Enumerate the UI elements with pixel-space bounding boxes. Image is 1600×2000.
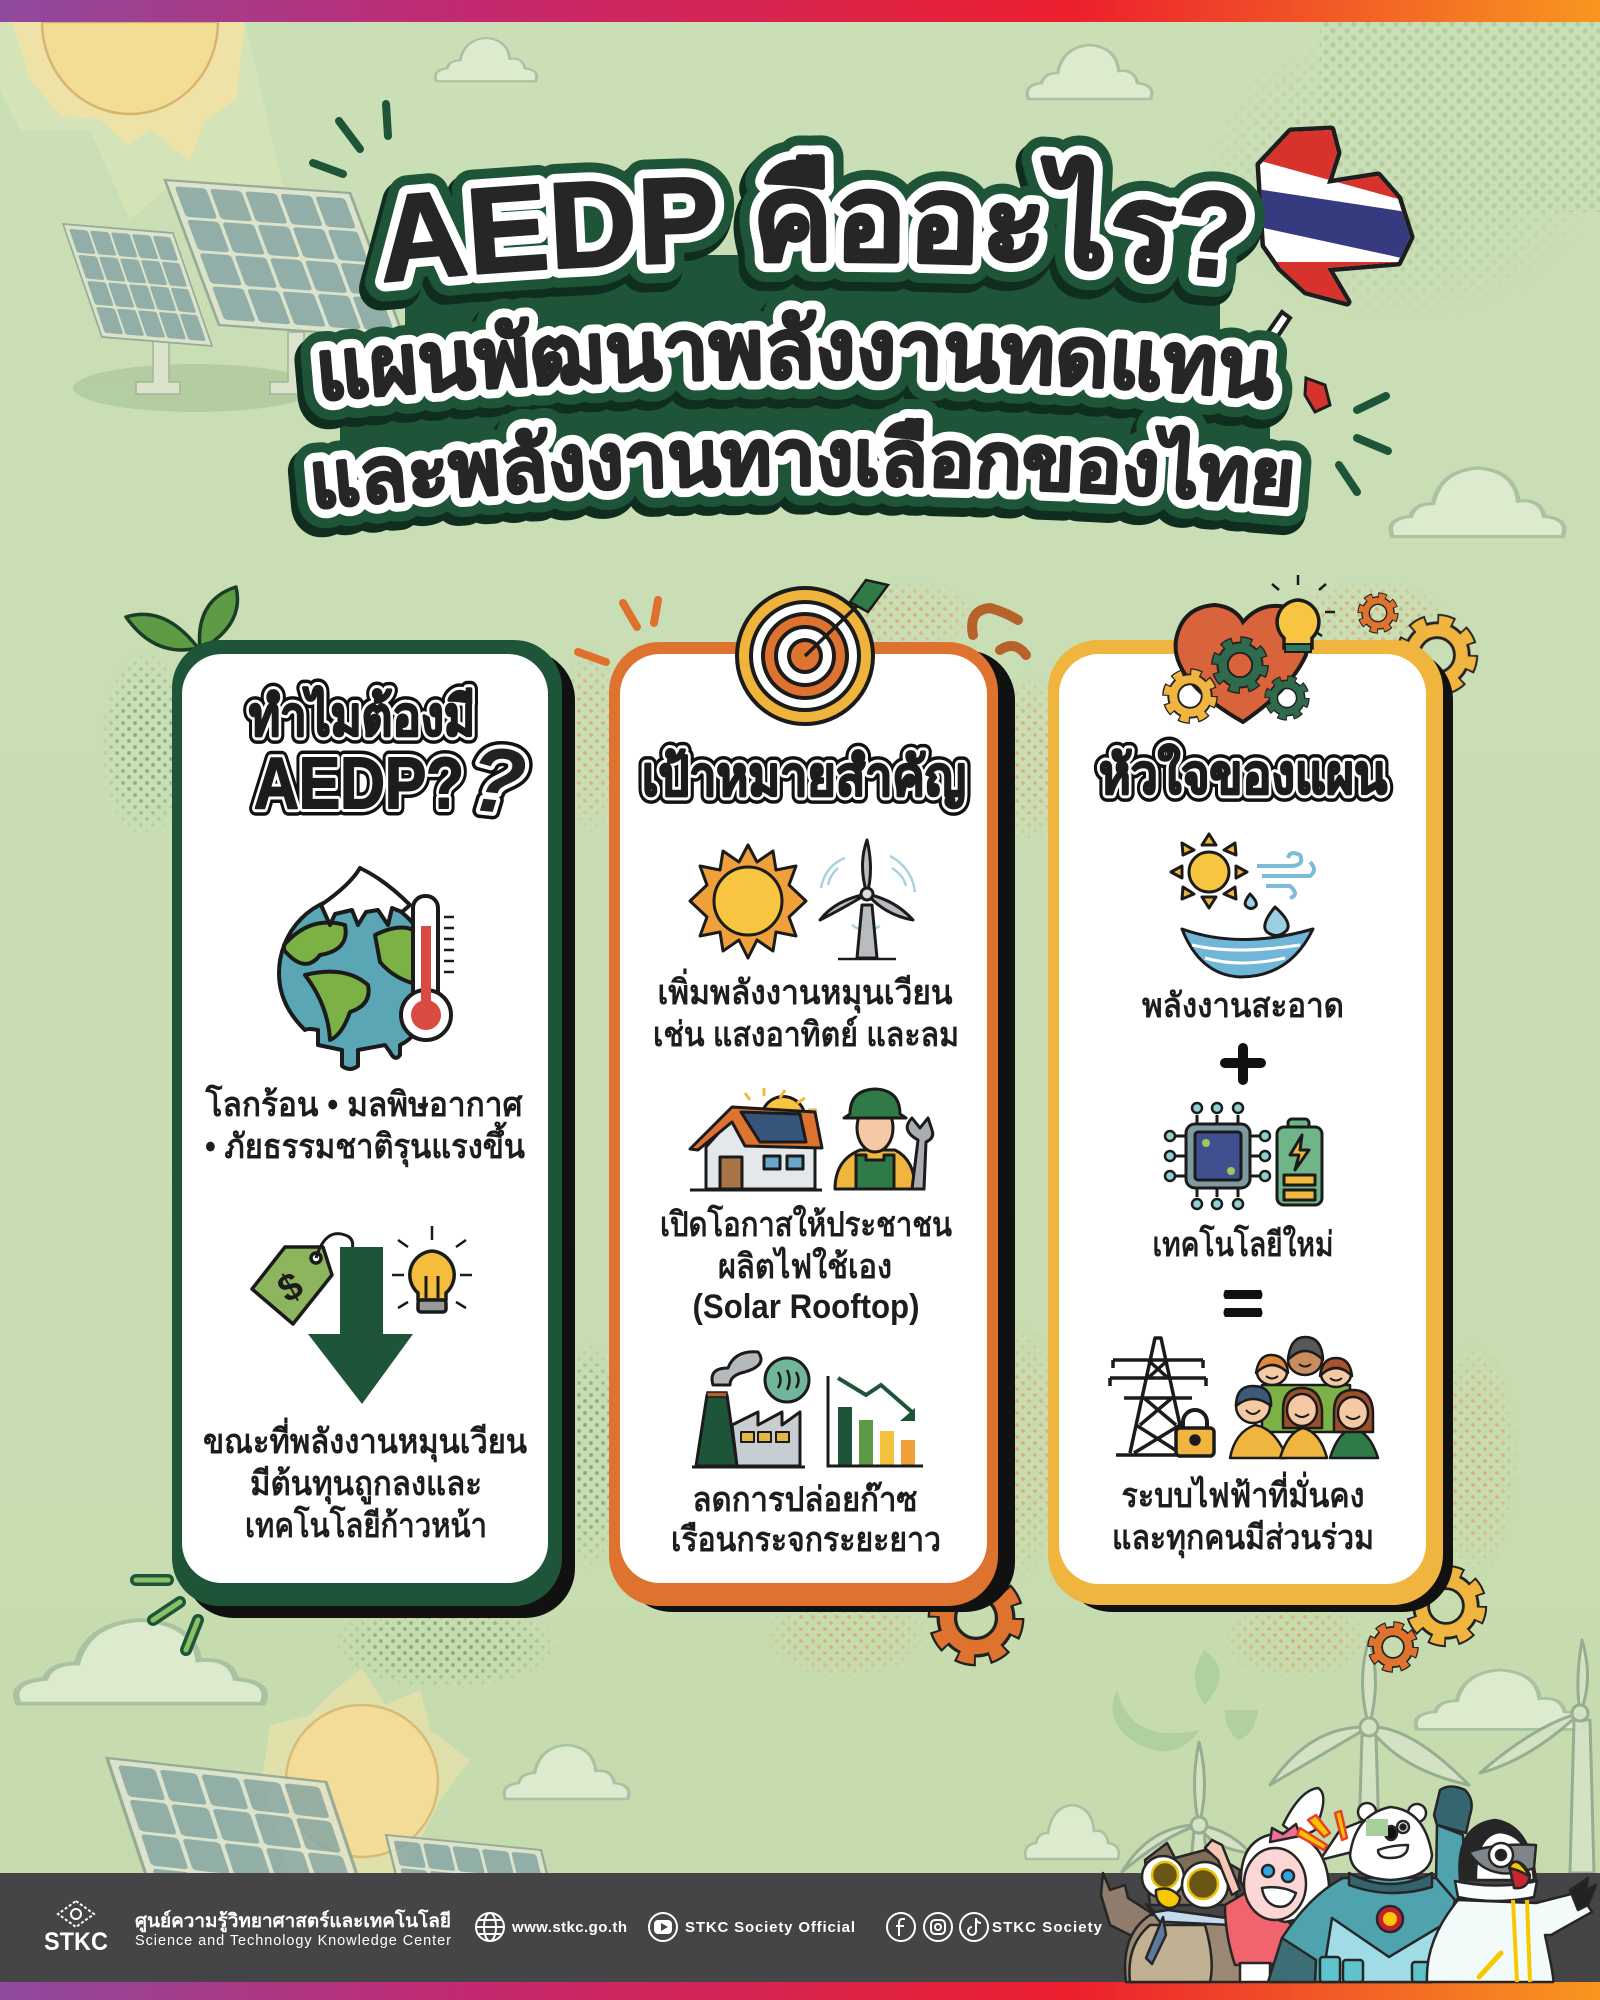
text: solar rooftop: เปิดโอกาสให้ประชาชน: [660, 1204, 952, 1244]
text: reduce greenhouse gas: [671, 1481, 941, 1559]
title line shadows: AEDP คืออะไร?: [359, 146, 1262, 310]
text: solar rooftop: [660, 1204, 952, 1326]
title line shadows: แผนพัฒนาพลังงานทดแทน: [294, 302, 1290, 430]
footer: website: www.stkc.go.th: [511, 1919, 627, 1936]
background solar panels top: [63, 180, 404, 412]
text: increase renewables: [653, 968, 959, 1054]
heading: why need: AEDP?: [254, 744, 464, 824]
icon: group of people: [1230, 1337, 1378, 1458]
title line faces: แผนพัฒนาพลังงานทดแทน: [319, 309, 1274, 402]
icon: power tower with lock: [1110, 1338, 1214, 1456]
title line faces: [312, 154, 1293, 510]
icon: price tag: $: [271, 1264, 310, 1311]
text: reduce greenhouse gas: ลดการปล่อยก๊าซ: [692, 1481, 918, 1519]
footer: STKC logo: STKC: [44, 1928, 108, 1956]
title line green outlines: AEDP คืออะไร?: [365, 135, 1265, 302]
heading: heart of the plan: หัวใจของแผน: [1099, 743, 1387, 805]
panel: heart of the plan card: [1048, 575, 1453, 1612]
footer: organisation name: [135, 1909, 451, 1949]
title line white outlines: แผนพัฒนาพลังงานทดแทน: [310, 300, 1282, 410]
footer: social media: [887, 1913, 1103, 1941]
footer band: [0, 1873, 1600, 1982]
footer: youtube: STKC Society Official: [685, 1919, 855, 1936]
card frame: [184, 650, 575, 1618]
icon: factory with smoke: [692, 1352, 809, 1467]
icon: heart with gears and bulb: [1167, 575, 1335, 722]
text: solar rooftop: ผลิตไฟใช้เอง: [718, 1246, 892, 1286]
text: global warming: [205, 1084, 525, 1168]
card frame: [622, 650, 1015, 1612]
text: stable grid and participation: ระบบไฟฟ้าที่มั่นคง: [1122, 1471, 1364, 1515]
card frame: [1062, 650, 1453, 1612]
text: falling cost: ขณะที่พลังงานหมุนเวียน: [203, 1417, 527, 1463]
footer: organisation name: Science and Technology Knowledge Center: [135, 1933, 451, 1949]
title spark marks right: [1339, 396, 1388, 492]
icon: target with dart: [737, 580, 888, 724]
text: global warming: โลกร้อน • มลพิษอากาศ: [205, 1084, 523, 1124]
icon: house with solar roof: [690, 1088, 822, 1190]
icon: microchip: [1165, 1103, 1270, 1209]
text: solar rooftop: (Solar Rooftop): [692, 1288, 920, 1326]
icon: worker with wrench: [835, 1089, 933, 1189]
title line shadows: และพลังงานทางเลือกของไทย: [288, 418, 1306, 538]
mascot: owl: [1101, 1843, 1242, 1982]
title line green outlines: แผนพัฒนาพลังงานทดแทน: [300, 290, 1292, 420]
heading: heart of the plan: หัวใจของแผน: [1099, 743, 1387, 805]
text: falling cost: เทคโนโลยีก้าวหน้า: [245, 1505, 487, 1545]
heading: key goals: เป้าหมายสำคัญ: [642, 747, 966, 808]
icon: light bulb: [392, 1226, 472, 1312]
heading: why need: ทำไมต้องมี: [249, 685, 475, 747]
icon: down arrow: [308, 1247, 413, 1404]
mascot: rabbit: [1205, 1788, 1365, 1982]
mascot: penguin: [1427, 1820, 1596, 1982]
text: global warming: • ภัยธรรมชาติรุนแรงขึ้น: [205, 1121, 525, 1168]
card decoration: gears behind card three: [1361, 596, 1480, 1668]
background solar panels bottom: [107, 1758, 571, 1970]
title line white outlines: และพลังงานทางเลือกของไทย: [304, 409, 1302, 518]
title line green outlines: และพลังงานทางเลือกของไทย: [294, 399, 1312, 528]
background wind turbines: [1122, 1640, 1594, 1873]
text: stable grid and participation: และทุกคนมีส่วนร่วม: [1112, 1519, 1374, 1559]
heading: why need: ?: [464, 728, 531, 835]
text: new technology: เทคโนโลยีใหม่: [1152, 1224, 1334, 1264]
Thailand flag map: [1250, 120, 1420, 412]
background sun bottom left: [262, 1668, 470, 1880]
icon: equals sign: [1224, 1290, 1262, 1317]
icon: sun wind water: [1171, 834, 1314, 977]
text: falling cost: [203, 1417, 527, 1545]
card decoration: orange gear and squiggle: [936, 608, 1026, 1658]
text: clean energy: พลังงานสะอาด: [1142, 987, 1344, 1025]
icon: wind turbine: [820, 840, 915, 959]
background sun top left: [0, 22, 300, 260]
background halftone dots: [100, 22, 1600, 1690]
card decoration: orange marks: [578, 600, 658, 662]
footer: social media: STKC Society: [992, 1919, 1103, 1936]
top gradient bar: [0, 0, 1600, 22]
title backing plate: [340, 255, 1270, 490]
title line faces: และพลังงานทางเลือกของไทย: [312, 418, 1293, 510]
title line shadows: [288, 146, 1306, 538]
heading: why need: ทำไมต้องมี: [249, 685, 475, 747]
title line white outlines: AEDP คืออะไร?: [375, 145, 1255, 292]
icon: price tag: [252, 1234, 353, 1324]
footer: youtube: [649, 1913, 855, 1941]
text: increase renewables: เพิ่มพลังงานหมุนเวียน: [658, 968, 952, 1014]
heading: key goals: เป้าหมายสำคัญ: [642, 747, 966, 808]
heading: heart of the plan: หัวใจของแผน: [1099, 743, 1387, 805]
icon: plus sign: [1225, 1048, 1261, 1080]
title line green outlines: [294, 135, 1312, 528]
bottom gradient bar: [0, 1982, 1600, 2000]
title line faces: AEDP คืออะไร?: [384, 154, 1246, 283]
heading: why need: ทำไมต้องมี: [249, 685, 475, 747]
icon: sun: [690, 845, 806, 958]
title: [288, 126, 1339, 538]
text: stable grid and participation: [1112, 1471, 1374, 1559]
card decoration: green dashes: [136, 1580, 198, 1650]
mascot: polar bear: [1268, 1786, 1472, 1982]
heading: why need: AEDP?: [254, 744, 464, 824]
text: reduce greenhouse gas: เรือนกระจกระยะยาว: [671, 1521, 941, 1559]
panel: why AEDP card: [172, 640, 575, 1618]
title spark marks left: [313, 104, 388, 174]
background faded leaves: [1112, 1650, 1258, 1751]
footer: organisation name: ศูนย์ความรู้วิทยาศาสตร์และเทคโนโลยี: [135, 1909, 451, 1933]
text: increase renewables: เช่น แสงอาทิตย์ และลม: [653, 1015, 959, 1054]
text: falling cost: มีต้นทุนถูกลงและ: [250, 1465, 482, 1505]
card decoration: leaves: [126, 587, 238, 650]
heading: why need: ?: [464, 728, 531, 835]
icon: falling emissions chart: [828, 1376, 923, 1466]
panel: key goals card: [609, 580, 1015, 1612]
icon: melting earth and thermometer: [279, 868, 454, 1069]
footer: website: [476, 1913, 627, 1941]
icon: battery: [1277, 1119, 1322, 1205]
footer: STKC logo: [44, 1901, 108, 1956]
title line white outlines: [304, 145, 1302, 518]
heading: key goals: เป้าหมายสำคัญ: [642, 747, 966, 808]
heading: why need: [249, 685, 531, 835]
heading: why need: AEDP?: [254, 744, 464, 824]
